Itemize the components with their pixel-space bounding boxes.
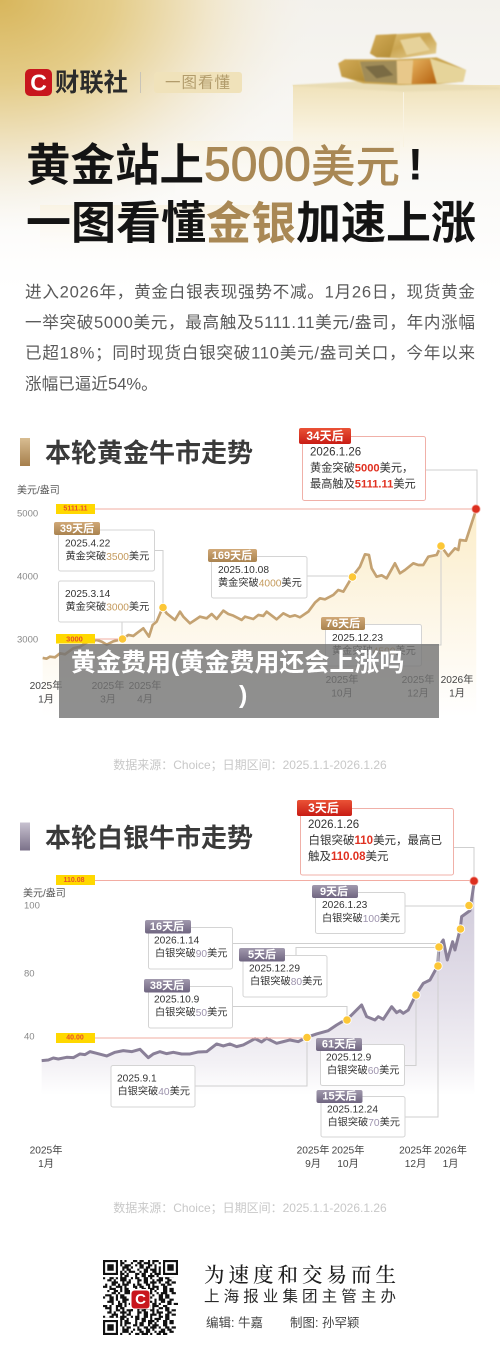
callout: 34 days: 2026.1.26 (310, 446, 361, 458)
callout: 15 days: 2025.12.24 (327, 1104, 378, 1116)
x axis labels: gold: 1月 (38, 694, 54, 706)
axis labels: gold: 美元/盎司 (17, 484, 60, 496)
callout: 5 days: 白银突破80美元 (250, 974, 322, 988)
panel: gold bull market chart (17, 428, 480, 772)
callout: 3000: 2025.3.14 (65, 589, 111, 600)
connectors: silver (195, 848, 474, 1117)
x axis labels: silver: 2026年 (434, 1144, 467, 1156)
footer credits: 上海报业集团主管主办 (204, 1288, 396, 1306)
callout: 38 days: 2025.10.9 (154, 994, 200, 1006)
callout: 169 days: 169天后 (212, 548, 252, 562)
callout: 61 days: 2025.12.9 (326, 1052, 372, 1064)
callout: 40 dollars (111, 1066, 195, 1107)
intro paragraph (25, 282, 475, 394)
milestone dots: gold (118, 505, 480, 643)
callout: 9 days (312, 884, 405, 934)
title (26, 130, 476, 248)
intro paragraph: 一举突破5000美元，最高触及5111.11美元/盎司，年内涨幅 (25, 313, 475, 332)
footer credits: 编辑: 牛嘉 (206, 1315, 263, 1330)
axis labels: silver (23, 886, 66, 1042)
callout: 3 days (297, 800, 454, 875)
callout: 9 days: 2026.1.23 (322, 900, 368, 911)
icon: gold bars (293, 33, 500, 92)
x axis labels: gold: 2026年 (441, 673, 473, 686)
callout: 34 days: 34天后 (306, 428, 344, 443)
callout: 169 days: 2025.10.08 (218, 565, 269, 576)
intro paragraph: 涨幅已逼近54%。 (25, 374, 158, 394)
QR code (103, 1260, 178, 1335)
callout: 39 days: 黄金突破3500美元 (66, 550, 149, 562)
connectors: gold (122, 470, 477, 645)
reference line: 110.08: 110.08 (63, 877, 85, 884)
x axis labels: silver: 2025年 (30, 1144, 62, 1156)
overlay caption banner: 黄金费用(黄金费用还会上涨吗 (71, 649, 404, 677)
tag: 一图看懂 (154, 72, 242, 93)
axis labels: gold: 5000 (17, 508, 38, 520)
title: 5000 (204, 138, 311, 192)
callout: 38 days (144, 978, 232, 1028)
callout: 39 days: 2025.4.22 (65, 538, 111, 550)
callout: 3 days: 3天后 (308, 800, 339, 815)
panel: silver bull market chart (20, 800, 478, 1215)
axis labels: silver: 美元/盎司 (23, 886, 66, 900)
callout: 5 days: 2025.12.29 (249, 964, 300, 974)
x axis labels: silver: 9月 (305, 1158, 321, 1170)
logo: 财联社 (25, 69, 128, 97)
callout: 34 days (299, 428, 426, 500)
x axis labels: silver: 1月 (443, 1158, 458, 1170)
x axis labels: silver: 2025年 (332, 1144, 364, 1156)
source note: silver: 数据来源：Choice；日期区间：2025.1.1-2026.1.26 (113, 1200, 387, 1215)
callout: 3 days: 白银突破110美元，最高已 (308, 833, 442, 847)
title: 黄金站上 (26, 142, 204, 190)
callout: 76 days: 2025.12.23 (332, 633, 383, 644)
title: ! (408, 140, 423, 190)
x axis labels: gold: 2025年 (326, 673, 358, 686)
axis labels: gold (17, 484, 60, 646)
callout: 9 days: 9天后 (320, 884, 348, 898)
intro paragraph: 已超18%；同时现货白银突破110美元/盎司关口，今年以来 (25, 344, 475, 362)
x axis labels: gold: 2025年 (129, 679, 161, 692)
callout: 34 days: 黄金突破5000美元， (310, 460, 413, 474)
overlay caption banner: ) (239, 681, 247, 709)
callout: 16 days (145, 919, 232, 969)
callout: 16 days: 白银突破90美元 (155, 946, 227, 960)
callout: 3000: 黄金突破3000美元 (66, 600, 149, 613)
callout: 39 days (54, 521, 154, 571)
reference line: 5111.11: 5111.11 (63, 506, 88, 512)
x axis labels: gold: 1月 (449, 688, 465, 700)
callout: 34 days: 最高触及5111.11美元 (310, 476, 416, 490)
x axis labels: gold: 3月 (100, 694, 116, 706)
line chart: gold price (43, 509, 476, 717)
callout: 76 days (321, 616, 422, 666)
source note: gold: 数据来源：Choice；日期区间：2025.1.1-2026.1.26 (113, 757, 387, 772)
x axis labels: gold: 2025年 (92, 679, 124, 692)
x axis labels: gold: 2025年 (30, 679, 62, 692)
callout: 16 days: 2026.1.14 (154, 936, 200, 946)
reference line: 3000 (56, 634, 122, 644)
callout: 3 days: 2026.1.26 (308, 819, 359, 831)
overlay caption banner (59, 644, 439, 718)
footer credits: 为速度和交易而生 (204, 1264, 396, 1287)
reference line: 110.08 (56, 875, 474, 885)
callout: 39 days: 39天后 (60, 521, 94, 535)
axis labels: silver: 100 (24, 900, 40, 912)
callout: 40 dollars: 白银突破40美元 (118, 1084, 190, 1098)
x axis labels: gold: 12月 (407, 688, 429, 700)
x axis labels: silver: 1月 (38, 1158, 54, 1170)
callout: 5 days: 5天后 (248, 947, 276, 961)
callout: 76 days: 黄金突破4500美元 (332, 644, 416, 657)
intro paragraph: 进入2026年，黄金白银表现强势不减。1月26日，现货黄金 (25, 282, 475, 302)
line chart: silver price (42, 882, 474, 1095)
x axis labels: gold: 4月 (137, 694, 153, 706)
tag: 一图看懂: 一图看懂 (165, 74, 230, 92)
callout: 169 days: 黄金突破4000美元 (218, 576, 302, 589)
axis labels: gold: 3000 (17, 634, 38, 646)
footer credits (204, 1264, 396, 1330)
callout: 15 days: 白银突破70美元 (328, 1116, 400, 1128)
callout: 15 days: 15天后 (322, 1088, 357, 1102)
QR code: C (135, 1291, 146, 1308)
x axis labels: silver: 10月 (337, 1158, 359, 1170)
callout: 3 days: 触及110.08美元 (308, 849, 389, 863)
axis labels: silver: 80 (24, 968, 35, 980)
x axis labels: silver: 2025年 (399, 1144, 432, 1156)
callout: 61 days: 61天后 (322, 1036, 356, 1050)
footer credits: 制图: 孙罕颖 (290, 1316, 359, 1330)
callout: 76 days: 76天后 (326, 616, 360, 630)
callout: 16 days: 16天后 (150, 919, 184, 933)
callout: 9 days: 白银突破100美元 (322, 912, 400, 924)
callout: 3000 (58, 581, 154, 622)
callout: 15 days (316, 1088, 405, 1137)
heading: silver: 本轮白银牛市走势 (45, 823, 253, 853)
callout: 61 days (316, 1036, 404, 1086)
x axis labels: gold: 10月 (331, 688, 353, 700)
reference line: 40.00 (56, 1033, 307, 1043)
x axis labels: silver (30, 1144, 467, 1170)
heading: gold: 本轮黄金牛市走势 (45, 438, 253, 468)
milestone dots: silver (303, 877, 478, 1042)
callout: 38 days: 38天后 (150, 978, 184, 992)
reference line: 5111.11 (56, 504, 476, 514)
title: 一图看懂金银加速上涨 (26, 198, 476, 248)
x axis labels: silver: 12月 (405, 1158, 426, 1170)
axis labels: silver: 40 (24, 1032, 35, 1042)
callout: 40 dollars: 2025.9.1 (117, 1074, 157, 1084)
axis labels: gold: 4000 (17, 572, 38, 582)
header background (0, 0, 500, 290)
callout: 38 days: 白银突破50美元 (155, 1006, 227, 1018)
x axis labels: gold: 2025年 (402, 673, 434, 686)
logo: 财联社: 财联社 (55, 69, 128, 97)
x axis labels: gold (30, 673, 473, 706)
reference line: 3000: 3000 (66, 634, 83, 644)
callout: 61 days: 白银突破60美元 (327, 1064, 399, 1076)
callout: 5 days (239, 947, 327, 997)
reference line: 40.00: 40.00 (66, 1034, 84, 1042)
callout: 169 days (208, 548, 307, 598)
title: 美元 (311, 130, 400, 195)
x axis labels: silver: 2025年 (297, 1144, 329, 1156)
logo: 财联社: C (30, 70, 47, 96)
